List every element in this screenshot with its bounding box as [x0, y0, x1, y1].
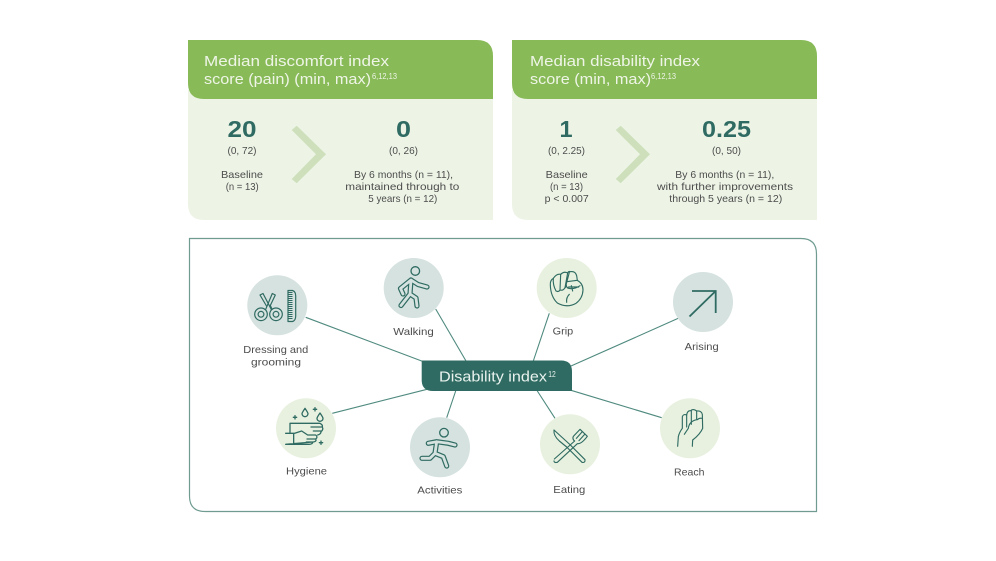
6 month value: through 5 years (n = 12)	[669, 194, 782, 205]
heading: 6,12,13	[651, 71, 676, 81]
baseline value	[545, 116, 589, 205]
node: hygiene	[276, 398, 336, 477]
baseline value: Baseline	[221, 170, 263, 181]
icon: diagonal arrow	[690, 291, 716, 316]
central node	[422, 360, 572, 391]
arrow: chevron	[292, 126, 326, 183]
label: Eating	[553, 485, 586, 496]
baseline value: 1	[559, 116, 573, 142]
panel: median disability index	[512, 40, 817, 220]
icon: washing hands	[286, 408, 323, 444]
baseline value: (0, 2.25)	[548, 146, 585, 157]
heading: score (min, max)	[530, 71, 651, 88]
icon: running figure	[422, 428, 455, 466]
6 month value: (0, 26)	[389, 146, 418, 157]
6 month value: 5 years (n = 12)	[368, 194, 437, 205]
node: dressing and grooming	[243, 275, 309, 368]
card header	[188, 40, 493, 99]
6 month value: (0, 50)	[712, 146, 741, 157]
icon: knife and fork	[554, 429, 587, 462]
node: activities	[410, 417, 470, 497]
card header	[512, 40, 817, 99]
label: Activities	[417, 486, 462, 497]
heading	[204, 53, 397, 88]
6 month value	[656, 116, 793, 205]
label: Walking	[393, 327, 434, 338]
icon: raised hand	[678, 410, 703, 446]
panel outline	[190, 238, 816, 512]
central node: 12	[548, 369, 556, 379]
label: Grip	[553, 326, 573, 338]
baseline value: 20	[228, 116, 256, 142]
6 month value: maintained through to	[345, 182, 460, 193]
heading: 6,12,13	[372, 71, 397, 81]
label: Reach	[674, 468, 705, 479]
baseline value	[221, 116, 263, 193]
label: grooming	[251, 357, 301, 368]
baseline value: (0, 72)	[228, 146, 256, 157]
6 month value	[345, 116, 460, 205]
6 month value: By 6 months (n = 11),	[354, 170, 453, 181]
node: walking	[384, 258, 444, 338]
arrow: chevron	[616, 126, 650, 183]
node: arising	[673, 272, 733, 353]
baseline value: Baseline	[546, 170, 588, 181]
panel: disability index diagram	[190, 238, 816, 512]
node: eating	[540, 414, 600, 496]
label: Arising	[685, 342, 719, 353]
heading	[530, 53, 701, 88]
label: Hygiene	[286, 466, 327, 477]
node: reach	[660, 398, 720, 479]
baseline value: (n = 13)	[226, 182, 259, 193]
node: grip	[537, 258, 597, 338]
6 month value: 0	[396, 116, 411, 142]
connector lines	[306, 309, 678, 418]
baseline value: p < 0.007	[545, 194, 589, 205]
6 month value: 0.25	[702, 116, 751, 142]
icon: scissors and comb	[255, 290, 296, 322]
label: Dressing and	[243, 345, 309, 356]
card background	[188, 90, 493, 220]
icon: walking figure	[400, 267, 427, 306]
central node: Disability index	[439, 368, 548, 386]
label	[243, 345, 309, 368]
baseline value: (n = 13)	[550, 182, 583, 193]
icon: fist	[550, 271, 583, 306]
6 month value: By 6 months (n = 11),	[675, 170, 774, 181]
card background	[512, 90, 817, 220]
panel: median discomfort index	[188, 40, 493, 220]
heading: Median discomfort index	[204, 53, 390, 70]
heading: score (pain) (min, max)	[204, 71, 371, 88]
heading: Median disability index	[530, 53, 701, 70]
6 month value: with further improvements	[656, 182, 793, 193]
